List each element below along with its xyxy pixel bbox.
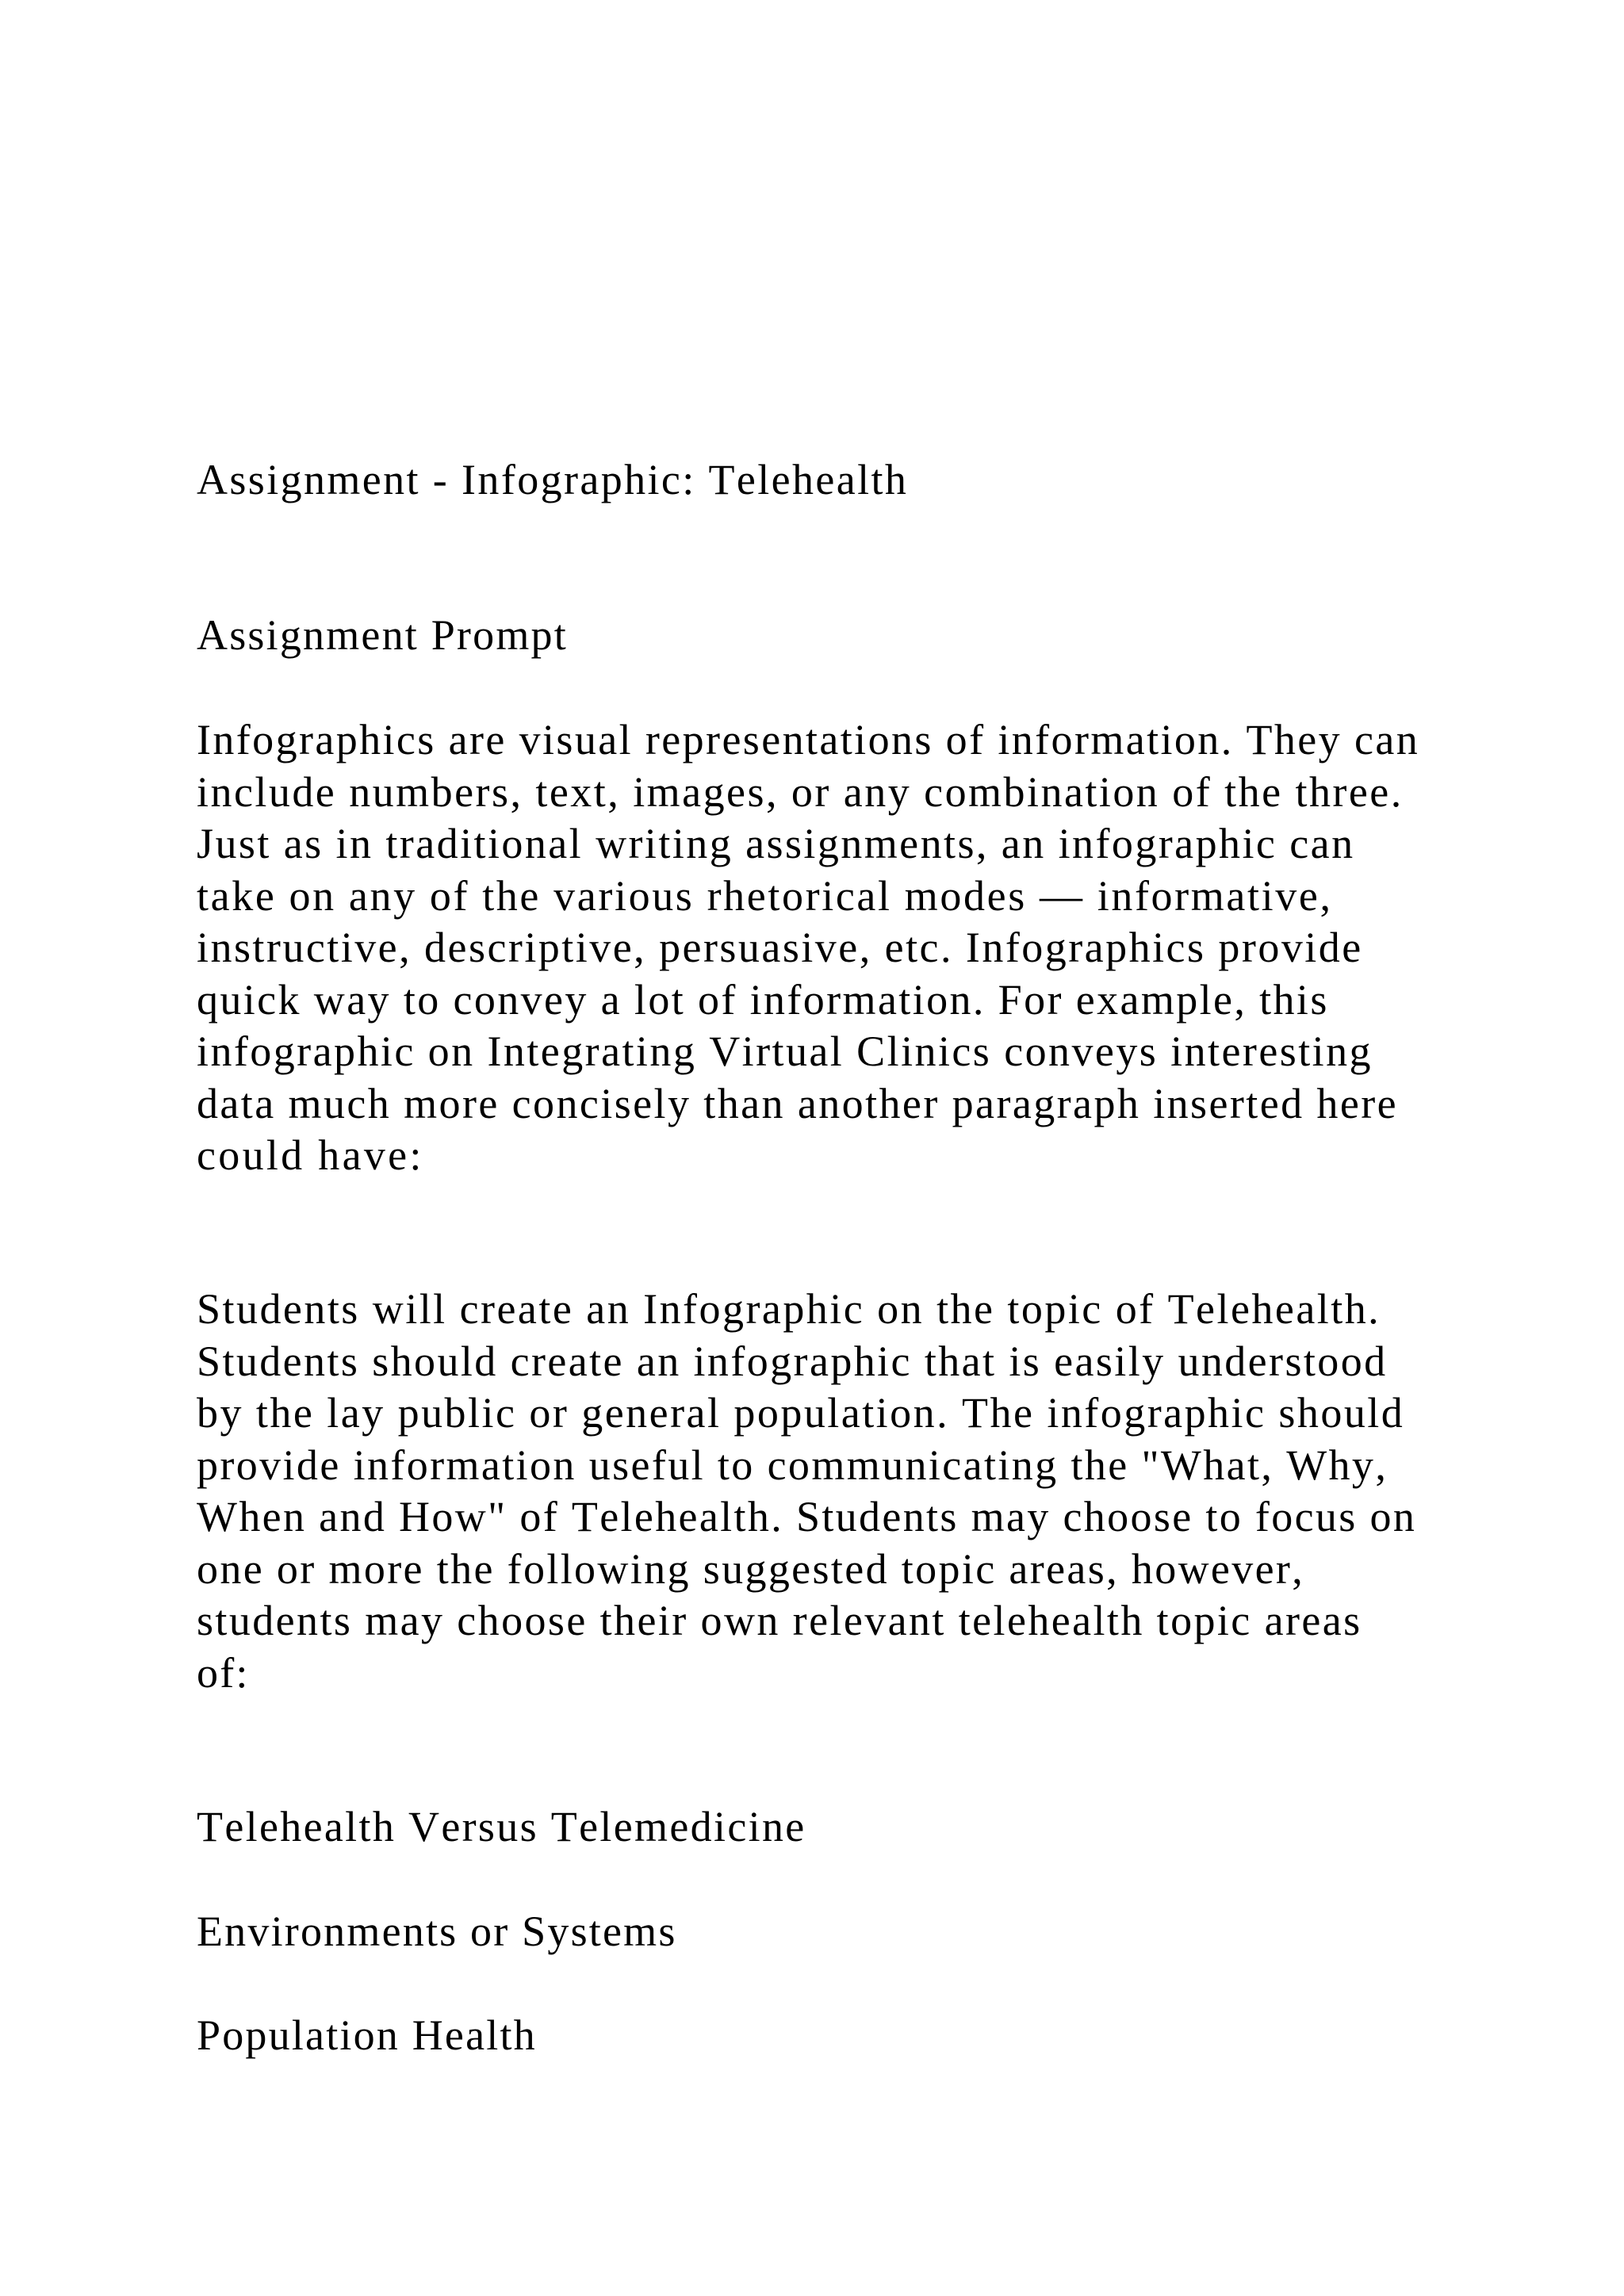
text block: student task: one or more the following suggested topic areas, however, [197, 1544, 1304, 1592]
text block: student task: Students will create an Infographic on the topic of Telehealth. [197, 1285, 1381, 1333]
text block: what infographics are: data much more concisely than another paragraph inserted here [197, 1080, 1398, 1127]
text block: student task: When and How" of Telehealth. Students may choose to focus on [197, 1493, 1416, 1540]
text block: what infographics are [197, 716, 1419, 1179]
list item: environments or systems: Environments or Systems [197, 1908, 677, 1955]
text block: what infographics are: infographic on Integrating Virtual Clinics conveys interesting [197, 1027, 1373, 1075]
text block: what infographics are: take on any of the various rhetorical modes — informative, [197, 872, 1333, 920]
text block: what infographics are: instructive, descriptive, persuasive, etc. Infographics provide [197, 924, 1363, 971]
text block: what infographics are: include numbers, text, images, or any combination of the three. [197, 767, 1404, 815]
text block: what infographics are: quick way to convey a lot of information. For example, this [197, 975, 1329, 1023]
text block: student task [197, 1285, 1416, 1697]
text block: student task: provide information useful to communicating the "What, Why, [197, 1441, 1388, 1489]
text block: student task: Students should create an infographic that is easily understood [197, 1337, 1388, 1384]
text block: student task: of: [197, 1649, 250, 1697]
list item: population health: Population Health [197, 2011, 537, 2059]
text block: what infographics are: Infographics are visual representations of information. They can [197, 716, 1419, 763]
text block: student task: by the lay public or general population. The infographic should [197, 1389, 1404, 1437]
text block: what infographics are: Just as in traditional writing assignments, an infographic can [197, 820, 1355, 867]
title: Assignment - Infographic: Telehealth [197, 456, 908, 503]
text block: what infographics are: could have: [197, 1131, 424, 1179]
text block: student task: students may choose their own relevant telehealth topic areas [197, 1597, 1362, 1644]
heading: assignment prompt: Assignment Prompt [197, 611, 568, 659]
list item: telehealth versus telemedicine: Telehealth Versus Telemedicine [197, 1803, 806, 1850]
